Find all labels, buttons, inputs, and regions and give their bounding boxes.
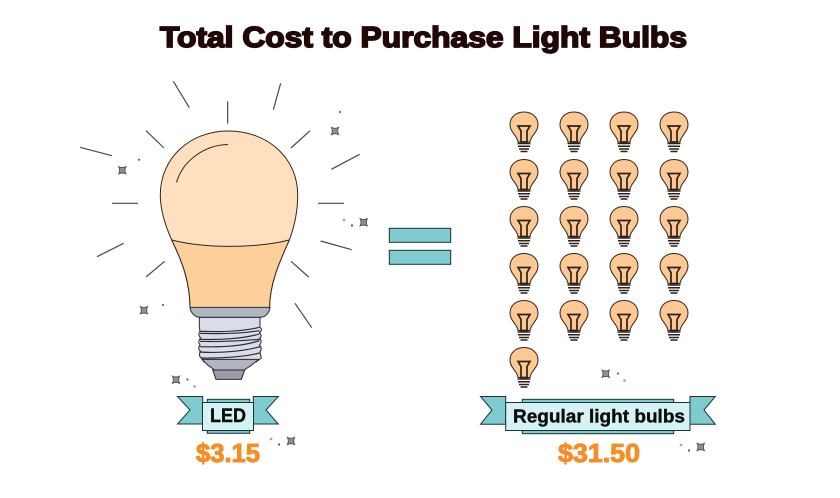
bulb highlight: [176, 144, 228, 182]
ribbon: regular light bulbs: [480, 396, 715, 434]
screw base: [190, 307, 270, 379]
icon: equals sign: [389, 228, 451, 264]
grid of 21 regular light bulbs: [510, 112, 688, 387]
title: Total Cost to Purchase Light Bulbs: [160, 22, 687, 54]
icon: light rays: [80, 81, 360, 328]
bulb glass: [160, 131, 298, 308]
price: LED: $3.15: [196, 440, 260, 468]
icon: LED light bulb: [160, 131, 298, 379]
bulb lower band: [172, 240, 289, 308]
price: regular light bulbs: $31.50: [558, 440, 640, 468]
ribbon: LED: [178, 396, 278, 433]
label: LED: LED: [210, 405, 246, 427]
icon: sparkles: [119, 111, 704, 452]
label: Regular light bulbs: Regular light bulbs: [513, 406, 685, 426]
